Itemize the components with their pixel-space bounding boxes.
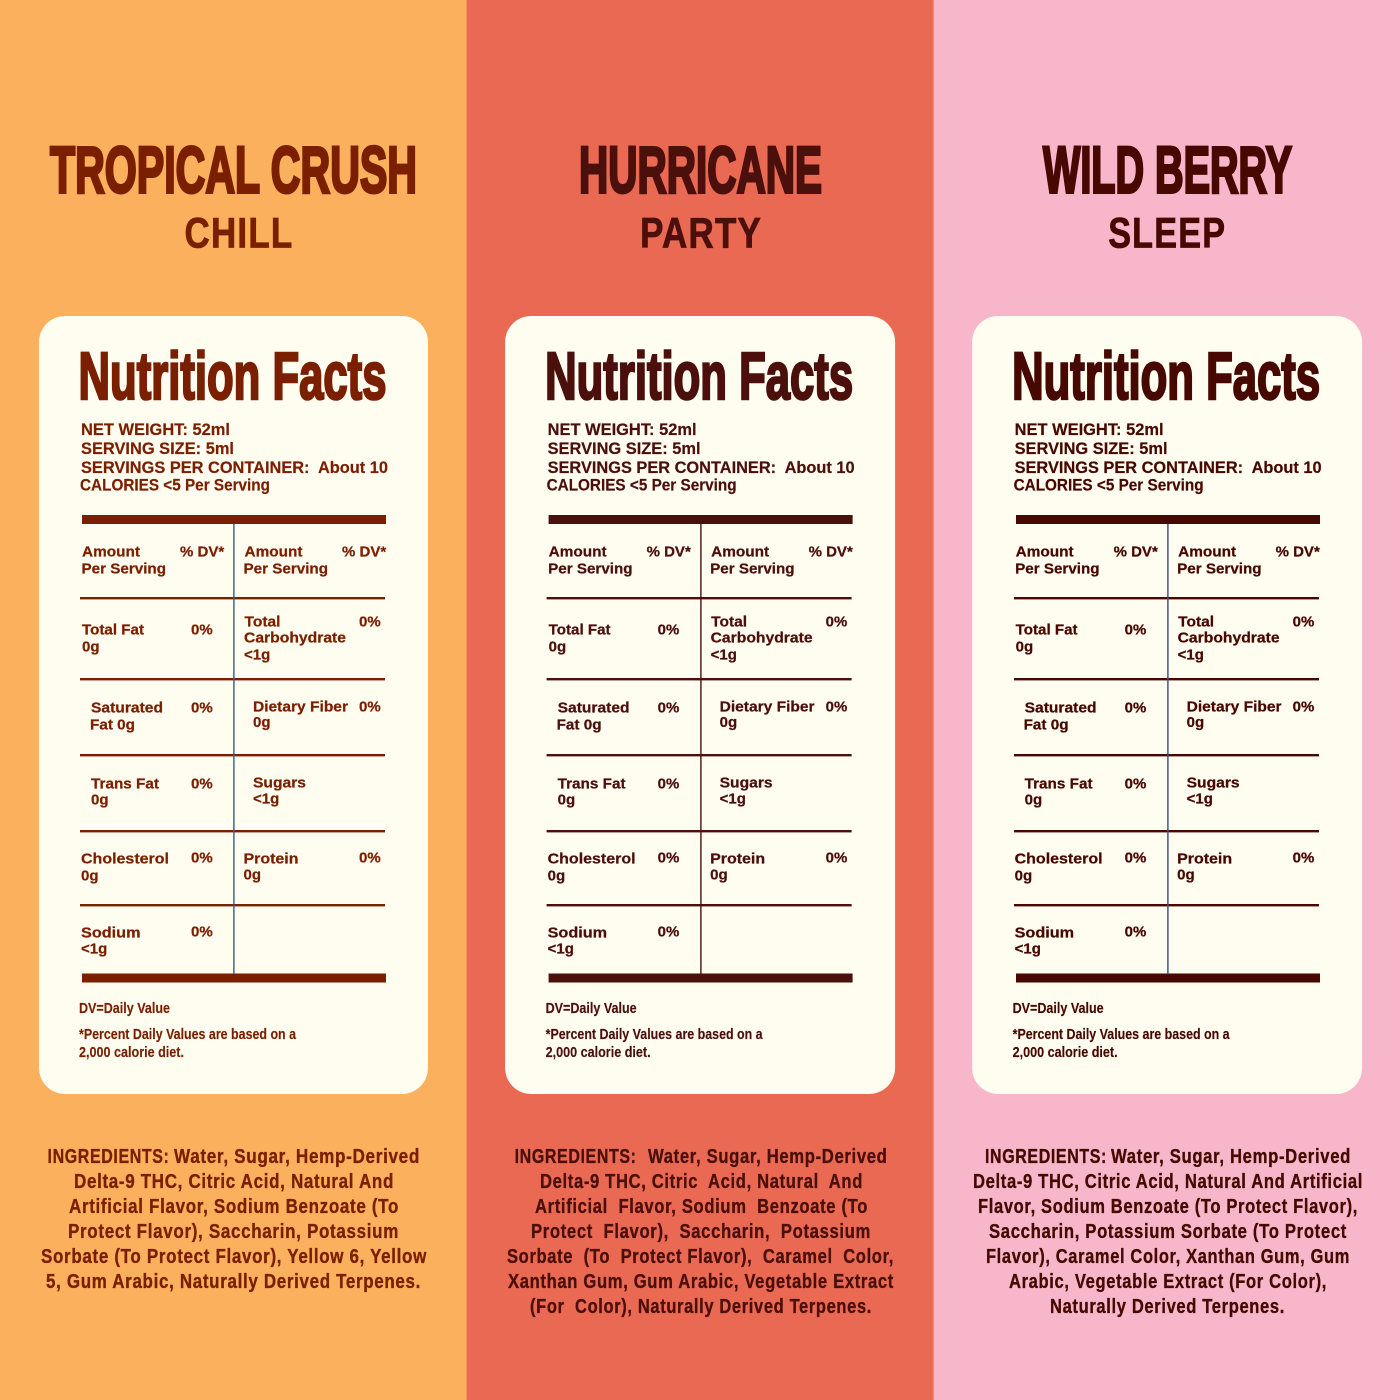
row: fat and carbohydrate: 0g	[82, 638, 100, 655]
row: cholesterol and protein: 0g	[548, 867, 565, 884]
row: cholesterol and protein: Protein	[1177, 850, 1232, 867]
footnotes: *Percent Daily Values are based on a	[79, 1026, 297, 1043]
ingredients: Water, Sugar, Hemp-Derived	[174, 1145, 420, 1168]
row: cholesterol and protein: 0%	[826, 849, 847, 866]
row: fat and carbohydrate: 0%	[1293, 613, 1314, 630]
row: saturated fat and fiber: Saturated	[558, 699, 630, 716]
row: saturated fat and fiber: 0%	[191, 699, 213, 716]
ingredients: Xanthan Gum, Gum Arabic, Vegetable Extract	[508, 1270, 894, 1293]
serving information: SERVING SIZE: 5ml	[548, 439, 701, 458]
row: fat and carbohydrate: <1g	[1178, 646, 1204, 663]
row: sodium: 0%	[1125, 923, 1146, 940]
ingredients: Water, Sugar, Hemp-Derived	[1111, 1145, 1351, 1168]
row: cholesterol and protein: 0%	[658, 849, 679, 866]
footnotes	[546, 1000, 763, 1061]
row: saturated fat and fiber: 0%	[359, 698, 381, 715]
row: saturated fat and fiber: Fat 0g	[557, 716, 602, 733]
row: sodium: 0%	[658, 923, 679, 940]
ingredients: Sorbate (To Protect Flavor), Caramel Color,	[507, 1245, 894, 1268]
serving information: SERVINGS PER CONTAINER: About 10	[548, 458, 855, 477]
footnotes: DV=Daily Value	[1013, 1000, 1104, 1017]
row: saturated fat and fiber: Dietary Fiber	[720, 698, 815, 715]
footnotes: 2,000 calorie diet.	[546, 1044, 651, 1061]
ingredients: INGREDIENTS:	[48, 1145, 170, 1168]
row: fat and carbohydrate: 0%	[1125, 621, 1146, 638]
row: fat and carbohydrate: Total	[244, 613, 280, 630]
footnotes: *Percent Daily Values are based on a	[546, 1026, 763, 1043]
footnotes: 2,000 calorie diet.	[79, 1044, 184, 1061]
serving information	[547, 420, 855, 494]
row: trans fat and sugars	[1025, 774, 1240, 808]
panel background pink	[934, 0, 1400, 1400]
row: cholesterol and protein: 0g	[81, 867, 99, 884]
row: trans fat and sugars: 0%	[658, 775, 679, 792]
footnotes: *Percent Daily Values are based on a	[1013, 1026, 1230, 1043]
header row: Per Serving	[548, 560, 633, 577]
header row: Amount	[1178, 543, 1236, 560]
serving information: NET WEIGHT: 52ml	[1015, 420, 1164, 439]
header row: % DV*	[1114, 543, 1158, 560]
panel: hurricane party	[467, 0, 935, 1400]
panel: tropical crush chill	[0, 0, 467, 1400]
header row: Amount	[82, 543, 140, 560]
row: fat and carbohydrate: Total	[1178, 613, 1214, 630]
row: cholesterol and protein	[1015, 849, 1314, 884]
header row: Amount	[1016, 543, 1074, 560]
ingredients	[507, 1145, 894, 1318]
header row: Amount	[711, 543, 769, 560]
subheading: Party: PARTY	[640, 211, 762, 258]
row: fat and carbohydrate: 0g	[549, 638, 566, 655]
panel background orange	[0, 0, 467, 1400]
serving information: SERVING SIZE: 5ml	[1015, 439, 1168, 458]
row: trans fat and sugars: 0g	[1025, 791, 1042, 808]
card background	[39, 316, 428, 1094]
row: cholesterol and protein: 0g	[244, 866, 261, 883]
serving information: SERVING SIZE: 5ml	[81, 439, 234, 458]
nutrition card	[39, 316, 428, 1094]
ingredients	[41, 1145, 427, 1293]
row: fat and carbohydrate: Total Fat	[549, 621, 611, 638]
row: saturated fat and fiber: 0g	[720, 714, 737, 731]
panel: wild berry sleep	[934, 0, 1400, 1400]
header row: Per Serving	[1015, 560, 1100, 577]
card title: Nutrition Facts	[545, 340, 853, 414]
row: trans fat and sugars: 0g	[558, 791, 575, 808]
row: fat and carbohydrate: Carbohydrate	[244, 629, 346, 646]
ingredients	[973, 1145, 1363, 1318]
row: sodium: Sodium	[548, 924, 607, 941]
row: cholesterol and protein: Protein	[710, 850, 765, 867]
row: sodium: <1g	[81, 940, 107, 957]
serving information	[80, 420, 388, 494]
row: saturated fat and fiber: 0g	[1187, 714, 1204, 731]
header row: Per Serving	[1177, 560, 1262, 577]
ingredients: Water, Sugar, Hemp-Derived	[648, 1145, 887, 1168]
ingredients: Delta-9 THC, Citric Acid, Natural And	[74, 1170, 394, 1193]
row: fat and carbohydrate: Total Fat	[82, 621, 144, 638]
row: saturated fat and fiber: Fat 0g	[90, 716, 135, 733]
header row	[1015, 543, 1320, 577]
card title: Nutrition Facts	[78, 340, 386, 414]
row: sodium	[1015, 923, 1146, 957]
row: cholesterol and protein: 0%	[191, 849, 213, 866]
row: trans fat and sugars: Sugars	[253, 774, 306, 791]
heading: Hurricane: HURRICANE	[579, 134, 822, 206]
serving information: CALORIES <5 Per Serving	[1014, 476, 1204, 494]
header row: % DV*	[647, 543, 691, 560]
header row: Per Serving	[244, 560, 328, 577]
row: trans fat and sugars: Sugars	[720, 774, 773, 791]
panel background red	[467, 0, 935, 1400]
nutrition table	[1014, 515, 1320, 982]
row: trans fat and sugars: Trans Fat	[1025, 775, 1093, 792]
ingredients: INGREDIENTS:	[985, 1145, 1107, 1168]
card background	[505, 316, 895, 1094]
serving information: SERVINGS PER CONTAINER: About 10	[81, 458, 388, 477]
row: saturated fat and fiber: Fat 0g	[1024, 716, 1069, 733]
row: sodium: <1g	[1015, 940, 1041, 957]
row: fat and carbohydrate: Total Fat	[1016, 621, 1078, 638]
row: sodium: Sodium	[81, 924, 140, 941]
row: cholesterol and protein: 0g	[1015, 867, 1032, 884]
nutrition table	[80, 515, 386, 982]
ingredients: Arabic, Vegetable Extract (For Color),	[1009, 1270, 1327, 1293]
row: cholesterol and protein	[548, 849, 847, 884]
row: saturated fat and fiber: 0%	[1293, 698, 1314, 715]
serving information: CALORIES <5 Per Serving	[547, 476, 737, 494]
row: fat and carbohydrate: 0g	[1016, 638, 1033, 655]
row: saturated fat and fiber: Dietary Fiber	[1187, 698, 1282, 715]
row: trans fat and sugars: Trans Fat	[558, 775, 626, 792]
row: fat and carbohydrate	[1016, 613, 1314, 663]
row: cholesterol and protein	[81, 849, 381, 884]
nutrition table	[547, 515, 853, 982]
heading: Tropical Crush: TROPICAL CRUSH	[50, 134, 417, 206]
row: trans fat and sugars: Trans Fat	[91, 775, 159, 792]
row: trans fat and sugars: <1g	[720, 790, 746, 807]
row: fat and carbohydrate	[549, 613, 847, 663]
row: cholesterol and protein: Cholesterol	[81, 850, 169, 867]
row: trans fat and sugars: <1g	[253, 790, 279, 807]
row: saturated fat and fiber: 0%	[1125, 699, 1146, 716]
ingredients: Artificial Flavor, Sodium Benzoate (To	[535, 1195, 868, 1218]
footnotes	[79, 1000, 297, 1061]
row: cholesterol and protein: 0%	[1125, 849, 1146, 866]
footnotes: 2,000 calorie diet.	[1013, 1044, 1118, 1061]
row: cholesterol and protein: Protein	[244, 850, 298, 867]
row: cholesterol and protein: Cholesterol	[1015, 850, 1103, 867]
header row: % DV*	[342, 543, 386, 560]
row: fat and carbohydrate: 0%	[826, 613, 847, 630]
header row	[82, 543, 386, 577]
serving information	[1014, 420, 1322, 494]
row: fat and carbohydrate: <1g	[244, 646, 270, 663]
serving information: CALORIES <5 Per Serving	[80, 476, 270, 494]
row: saturated fat and fiber: 0%	[826, 698, 847, 715]
row: fat and carbohydrate: Carbohydrate	[711, 629, 813, 646]
row: saturated fat and fiber	[1024, 698, 1314, 733]
ingredients: Protect Flavor), Saccharin, Potassium	[531, 1220, 871, 1243]
row: trans fat and sugars: <1g	[1187, 790, 1213, 807]
footnotes: DV=Daily Value	[546, 1000, 637, 1017]
ingredients: Protect Flavor), Saccharin, Potassium	[68, 1220, 399, 1243]
header row: Per Serving	[710, 560, 795, 577]
header row: Amount	[244, 543, 303, 560]
ingredients: Naturally Derived Terpenes.	[1050, 1295, 1285, 1318]
row: saturated fat and fiber: 0g	[253, 714, 271, 731]
row: fat and carbohydrate: Total	[711, 613, 747, 630]
row: trans fat and sugars: 0g	[91, 791, 109, 808]
row: sodium: Sodium	[1015, 924, 1074, 941]
serving information: SERVINGS PER CONTAINER: About 10	[1015, 458, 1322, 477]
row: cholesterol and protein: Cholesterol	[548, 850, 636, 867]
row: sodium	[548, 923, 679, 957]
row: saturated fat and fiber: Dietary Fiber	[253, 698, 348, 715]
row: saturated fat and fiber: 0%	[658, 699, 679, 716]
subheading: Chill: CHILL	[184, 211, 294, 258]
row: trans fat and sugars: 0%	[191, 775, 213, 792]
header row: Per Serving	[82, 560, 166, 577]
ingredients: Artificial Flavor, Sodium Benzoate (To	[69, 1195, 399, 1218]
row: sodium: 0%	[191, 923, 213, 940]
row: sodium: <1g	[548, 940, 574, 957]
footnotes: DV=Daily Value	[79, 1000, 170, 1017]
row: trans fat and sugars	[91, 774, 306, 808]
ingredients: INGREDIENTS:	[515, 1145, 637, 1168]
row: trans fat and sugars: 0%	[1125, 775, 1146, 792]
row: saturated fat and fiber	[90, 698, 381, 733]
row: saturated fat and fiber: Saturated	[1025, 699, 1097, 716]
row: fat and carbohydrate: 0%	[359, 613, 381, 630]
row: cholesterol and protein: 0g	[1177, 866, 1195, 883]
serving information: NET WEIGHT: 52ml	[81, 420, 230, 439]
row: trans fat and sugars: Sugars	[1187, 774, 1240, 791]
subheading: Sleep: SLEEP	[1108, 211, 1226, 258]
row: cholesterol and protein: 0%	[1293, 849, 1314, 866]
header row: Amount	[549, 543, 607, 560]
row: fat and carbohydrate	[82, 613, 381, 663]
row: cholesterol and protein: 0%	[359, 849, 381, 866]
footnotes	[1013, 1000, 1230, 1061]
row: fat and carbohydrate: 0%	[658, 621, 679, 638]
row: fat and carbohydrate: <1g	[711, 646, 737, 663]
header row: % DV*	[180, 543, 224, 560]
ingredients: Delta-9 THC, Citric Acid, Natural And	[540, 1170, 863, 1193]
row: trans fat and sugars	[558, 774, 773, 808]
header row	[548, 543, 853, 577]
nutrition card	[505, 316, 895, 1094]
row: fat and carbohydrate: Carbohydrate	[1178, 629, 1280, 646]
row: saturated fat and fiber	[557, 698, 847, 733]
ingredients: 5, Gum Arabic, Naturally Derived Terpenes.	[46, 1270, 421, 1293]
nutrition card	[972, 316, 1362, 1094]
header row: % DV*	[1276, 543, 1320, 560]
row: sodium	[81, 923, 213, 957]
header row: % DV*	[809, 543, 853, 560]
card background	[972, 316, 1362, 1094]
ingredients: (For Color), Naturally Derived Terpenes.	[530, 1295, 872, 1318]
row: fat and carbohydrate: 0%	[191, 621, 213, 638]
ingredients: Sorbate (To Protect Flavor), Yellow 6, Yellow	[41, 1245, 427, 1268]
row: cholesterol and protein: 0g	[710, 866, 728, 883]
row: saturated fat and fiber: Saturated	[91, 699, 163, 716]
serving information: NET WEIGHT: 52ml	[548, 420, 697, 439]
